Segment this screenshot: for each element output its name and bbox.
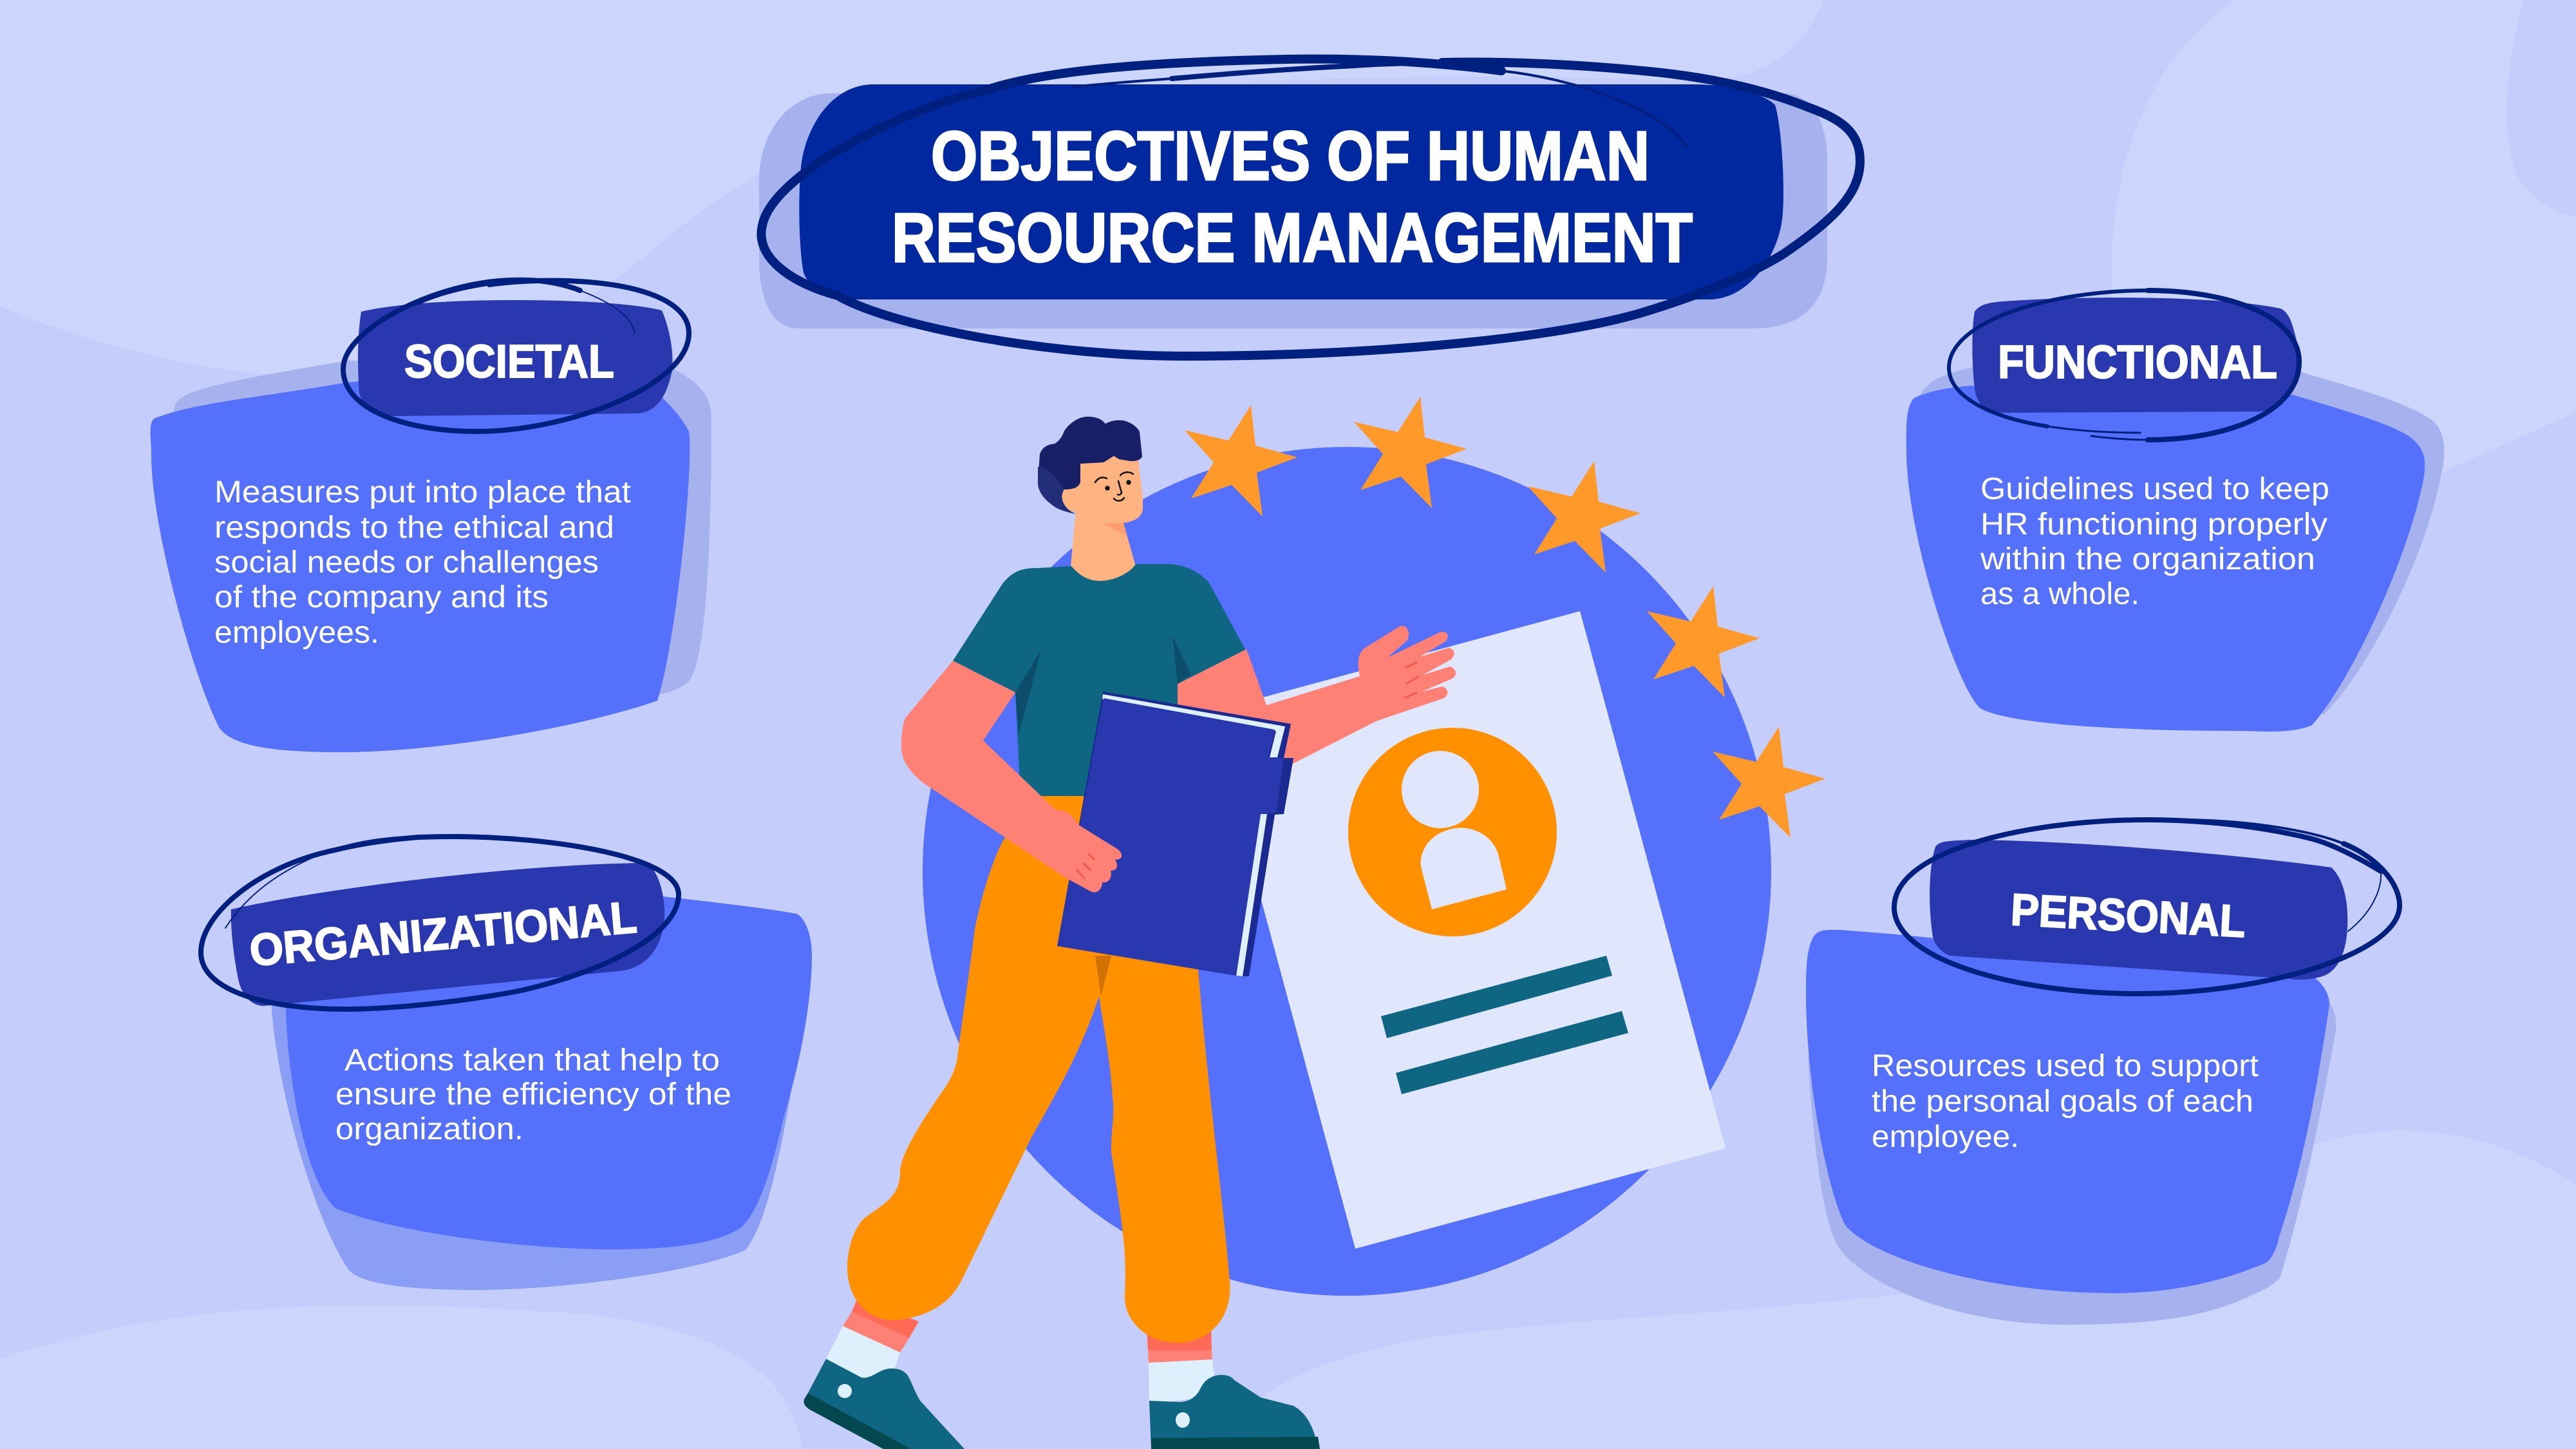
societal body text: of the company and its — [214, 580, 549, 614]
functional body text: as a whole. — [1980, 577, 2139, 611]
societal ring — [343, 280, 689, 431]
societal body text: employees. — [214, 616, 379, 650]
folded arm and hand — [901, 661, 1122, 893]
stars arc — [1185, 397, 1825, 838]
blue circle backdrop — [923, 447, 1771, 1296]
functional body text: within the organization — [1980, 542, 2315, 576]
personal body text — [1872, 1049, 2259, 1154]
profile document — [1210, 611, 1725, 1249]
facial features — [1095, 472, 1133, 501]
panel: societal — [151, 280, 711, 752]
hair — [1038, 417, 1142, 514]
panel: organizational — [201, 836, 812, 1290]
title text: RESOURCE MANAGEMENT — [892, 198, 1693, 276]
functional ring — [1949, 290, 2299, 440]
person — [804, 417, 1456, 1449]
organizational body text — [335, 1043, 731, 1146]
organizational shadow — [271, 966, 791, 1290]
personal shadow — [1808, 1002, 2336, 1325]
functional box — [1906, 386, 2425, 732]
societal body text — [214, 475, 631, 650]
societal box — [151, 361, 690, 752]
title text: OBJECTIVES OF HUMAN — [931, 117, 1650, 194]
title box — [799, 84, 1783, 299]
orange trousers — [847, 796, 1230, 1343]
title text — [892, 117, 1693, 276]
societal label — [358, 300, 673, 416]
front leg sock and shoe — [1147, 1327, 1320, 1449]
organizational body text: organization. — [335, 1112, 523, 1146]
personal box — [1806, 930, 2329, 1293]
teal shirt — [953, 564, 1246, 796]
functional heading: FUNCTIONAL — [1998, 337, 2277, 388]
neck and face — [1061, 457, 1143, 581]
personal ring — [1894, 820, 2400, 994]
central illustration — [804, 397, 1825, 1449]
reaching arm and hand — [1178, 626, 1456, 773]
societal body text: Measures put into place that — [214, 475, 631, 509]
back leg sock and shoe — [804, 1298, 964, 1449]
panel: functional — [1906, 290, 2444, 732]
functional label — [1972, 298, 2298, 413]
organizational ring — [201, 836, 679, 1009]
organizational body text: Actions taken that help to — [344, 1043, 720, 1077]
blue folder — [1057, 692, 1293, 976]
societal body text: responds to the ethical and — [214, 511, 614, 545]
title hand-drawn ring — [761, 59, 1860, 356]
organizational box — [286, 896, 812, 1249]
functional body text: HR functioning properly — [1980, 507, 2327, 542]
personal body text: Resources used to support — [1872, 1049, 2259, 1083]
organizational heading: ORGANIZATIONAL — [248, 892, 639, 976]
functional body text: Guidelines used to keep — [1980, 472, 2329, 506]
personal label — [1930, 840, 2347, 980]
personal body text: employee. — [1872, 1120, 2019, 1154]
organizational body text: ensure the efficiency of the — [335, 1077, 731, 1112]
functional shadow — [1915, 367, 2444, 715]
personal body text: the personal goals of each — [1872, 1084, 2253, 1119]
panel: personal — [1806, 820, 2400, 1325]
organizational label — [231, 863, 664, 1006]
personal heading: PERSONAL — [2009, 884, 2247, 947]
societal heading: SOCIETAL — [404, 336, 614, 388]
societal body text: social needs or challenges — [214, 545, 599, 580]
functional body text — [1980, 472, 2329, 611]
title shadow — [759, 93, 1827, 328]
title banner — [759, 59, 1860, 356]
societal shadow — [174, 361, 711, 696]
